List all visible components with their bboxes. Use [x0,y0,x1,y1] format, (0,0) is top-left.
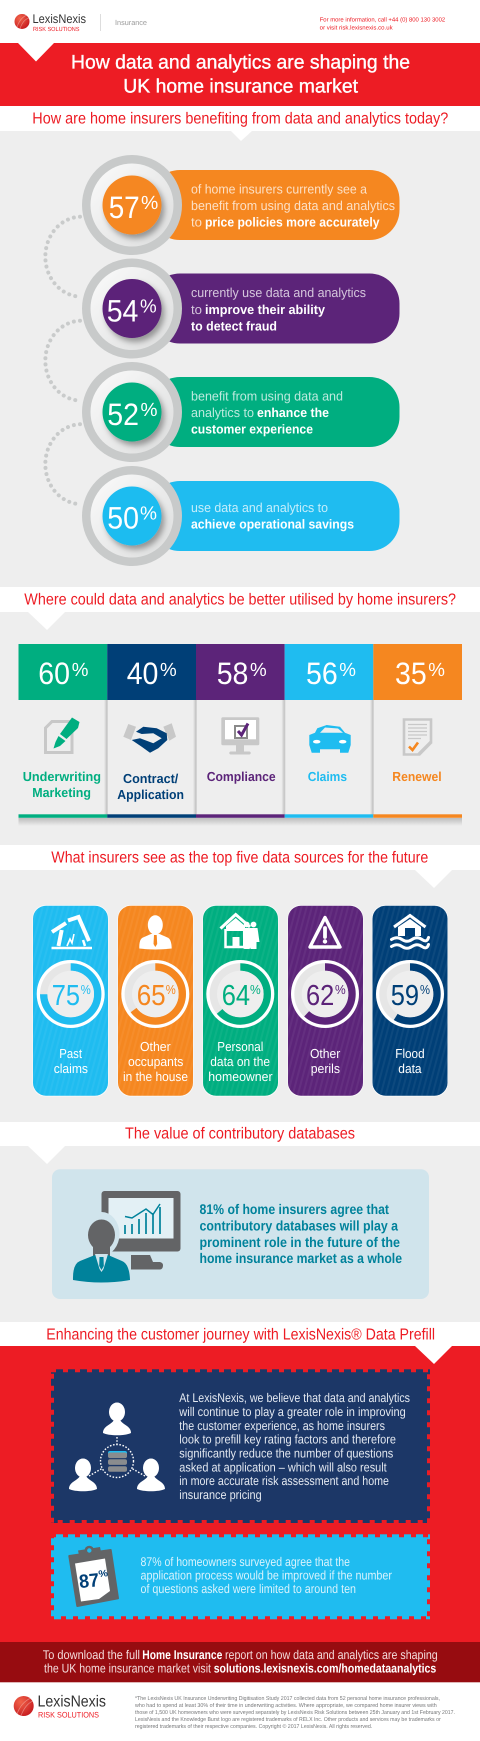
statistic text: application process would be improved if the number [140,1568,392,1582]
column: underwriting marketing 60%: % [72,660,88,681]
column: claims 56%: Claims [308,769,347,784]
icon: flooded house [392,916,428,948]
statement text [178,1391,410,1502]
product label: Insurance [115,18,147,27]
column: claims 56%: % [339,660,356,681]
statement text: At LexisNexis, we believe that data and analytics [179,1391,410,1405]
column: renewel 35%: Renewel [392,769,442,784]
card: flood data 59%: Flood [395,1046,425,1061]
callout text: prominent role in the future of the [200,1234,400,1250]
footnote: registered trademarks of their respective companies. Copyright © 2017 LexisNexis. All rights reserved. [135,1723,373,1730]
icon: people connected to database [69,1402,165,1491]
footer logo [14,1694,106,1720]
icon: handshake [123,723,176,753]
footnote: who had to spend at least 30% of their time in underwriting activities. Where appropriate, we compared home insurer views with [134,1702,437,1709]
benefit: 54%: 54 [107,294,138,329]
card: personal data 64%: homeowner [208,1069,273,1084]
header [14,12,446,33]
benefit: 50%: achieve operational savings [191,516,354,532]
footer logo: LexisNexis [38,1694,106,1711]
icon: analyst at monitor [73,1191,180,1282]
call to action: solutions.lexisnexis.com/homedataanalytics [214,1662,436,1676]
column: contract application 40% [107,644,196,818]
column: underwriting marketing 60% [18,644,107,818]
column: claims 56%: 56 [306,656,338,691]
footnote: those of 1,500 UK homeowners who were surveyed separately by LexisNexis Risk Solutions between 25th January and 1st February 2017. [135,1709,455,1716]
statement text: will continue to play a greater role in improving [178,1405,406,1419]
column: contract application 40%: Contract/ [123,771,179,786]
card: other occupants 65%: in the house [123,1069,188,1084]
column: claims 56% [285,644,373,818]
benefit: 50%: % [140,504,157,524]
column: underwriting marketing 60%: Marketing [32,785,91,800]
card: other perils 62%: Other [310,1046,341,1061]
card: flood data 59% [372,905,448,1096]
callout box [52,1169,429,1299]
column: contract application 40%: % [160,660,177,681]
card: other perils 62%: % [335,982,346,997]
footer logo: RISK SOLUTIONS [38,1710,99,1720]
benefit: 50% [82,466,400,566]
callout text: contributory databases will play a [200,1218,398,1234]
statement text: asked at application – which will also result [179,1460,387,1474]
contact details [320,16,446,32]
card: past claims 75%: claims [54,1061,88,1076]
title: UK home insurance market [123,76,359,98]
benefit: 57%: benefit from using data and analytics [191,198,395,213]
benefit: 54%: to detect fraud [191,318,277,334]
statistic text [140,1555,392,1596]
call to action: Home Insurance [142,1648,222,1662]
callout text: home insurance market as a whole [200,1250,402,1266]
callout text: 81% of home insurers agree that [200,1201,389,1217]
benefit: 54%: currently use data and analytics [191,285,366,300]
statement text: insurance pricing [179,1488,262,1502]
panel: data prefill [0,1346,480,1642]
heading: top five data sources: What insurers see as the top five data sources for the future [51,850,428,866]
icon: pen on document [46,718,80,752]
icon: clipboard: % [98,1568,109,1580]
statement text: in more accurate risk assessment and home [179,1474,389,1488]
column: compliance 58%: 58 [217,656,248,691]
column: contract application 40%: Application [117,787,184,802]
call to action: report on how data and analytics are shaping [225,1648,438,1662]
benefit: 54%: to [191,302,202,317]
card: past claims 75% [32,905,108,1096]
column: compliance 58%: % [250,660,267,681]
header logo [14,12,86,33]
benefit: 57%: 57 [109,190,140,225]
card: personal data 64%: Personal [217,1039,263,1054]
column: compliance 58% [196,644,285,818]
panel: top five data sources [0,870,480,1122]
footnote: LexisNexis and the Knowledge Burst logo are registered trademarks of RELX Inc. Other products and services may be trademarks or [135,1716,441,1723]
column: renewel 35%: 35 [395,656,427,691]
card: personal data 64%: 64 [222,980,250,1012]
heading: customer journey: Enhancing the customer journey with LexisNexis® Data Prefill [46,1326,435,1344]
card: personal data 64%: data on the [210,1054,270,1069]
title banner [0,43,480,106]
benefit: 57% [82,155,400,255]
benefit: 57%: % [141,193,158,214]
benefit: 54%: % [140,296,157,318]
benefit: 57%: of home insurers currently see a [191,182,368,196]
icon: monitor with checkbox [221,717,259,754]
icon: car [309,725,351,753]
card: other occupants 65%: % [166,982,176,997]
benefit: 52%: 52 [107,397,139,432]
card: other occupants 65%: occupants [128,1054,184,1069]
statement text: significantly reduce the number of questions [179,1446,393,1460]
card: other occupants 65%: 65 [137,980,166,1012]
icon: person in suit [139,915,172,950]
card: flood data 59%: 59 [391,980,419,1012]
benefit: 50%: 50 [107,501,139,536]
call to action [0,1642,480,1682]
card: 87% of homeowners [51,1534,430,1619]
card: other perils 62%: perils [311,1061,340,1076]
icon: house and family [220,914,260,949]
column: renewel 35%: % [428,660,445,681]
column: underwriting marketing 60%: Underwriting [23,769,101,784]
heading: contributory databases: The value of contributory databases [125,1126,355,1142]
call to action: To download the full [43,1648,140,1662]
card: other occupants 65% [118,905,194,1096]
contact details: or visit risk.lexisnexis.co.uk [320,24,394,32]
call to action: the UK home insurance market visit [44,1662,211,1676]
icon: signed document [403,718,432,756]
card: other perils 62% [288,905,364,1096]
contact details: For more information, call +44 (0) 800 130 3002 [320,16,446,24]
footnote [134,1695,455,1730]
icon: warning triangle [310,918,340,947]
card: other occupants 65%: Other [140,1039,171,1054]
card: past claims 75%: 75 [52,980,80,1012]
card: flood data 59%: data [398,1061,422,1076]
column: compliance 58%: Compliance [207,769,276,784]
title [71,52,410,98]
panel: where analytics could be better utilised [0,612,480,845]
header logo: LexisNexis [32,12,86,26]
card: past claims 75%: Past [59,1046,82,1061]
benefit: 52%: benefit from using data and [191,388,343,404]
card: flood data 59%: % [420,982,430,997]
benefit: 52% [82,362,400,462]
column: renewel 35% [373,644,462,818]
title: How data and analytics are shaping the [71,52,410,74]
benefit: 52%: customer experience [191,422,313,436]
icon: clipboard [69,1546,118,1606]
footnote: *The LexisNexis UK Insurance Underwriting Digitisation Study 2017 collected data from 52 personal home insurance professionals, [135,1695,440,1702]
benefit: 50%: use data and analytics to [191,500,328,515]
statement text: the customer experience, as home insurers [179,1419,385,1433]
column: underwriting marketing 60%: 60 [38,656,70,691]
icon: clipboard: 87 [78,1570,100,1593]
footer [14,1694,455,1730]
card: data prefill statement [51,1369,430,1523]
benefit: 54% [82,258,400,358]
benefit: 57%: to [191,214,202,230]
benefit: 52%: analytics to [191,405,254,420]
statistic text: 87% of homeowners surveyed agree that the [140,1555,350,1569]
callout text [200,1201,402,1266]
icon: collapsed house [52,917,92,948]
statement text: look to prefill key rating factors and therefore [179,1432,396,1446]
benefit: 52%: % [140,400,158,421]
card: past claims 75%: % [81,982,91,997]
card: personal data 64%: % [250,982,261,997]
card: personal data 64% [202,905,278,1096]
benefit: 54%: improve their ability [205,302,326,317]
column: contract application 40%: 40 [127,656,158,691]
card: other perils 62%: 62 [306,980,334,1012]
statistic text: of questions asked were limited to around ten [140,1582,356,1596]
panel: benefits today [0,131,480,587]
header logo: RISK SOLUTIONS [33,26,80,33]
benefit: 52%: enhance the [257,405,329,420]
benefit: 57%: price policies more accurately [205,214,380,230]
panel: contributory databases [0,1146,480,1322]
